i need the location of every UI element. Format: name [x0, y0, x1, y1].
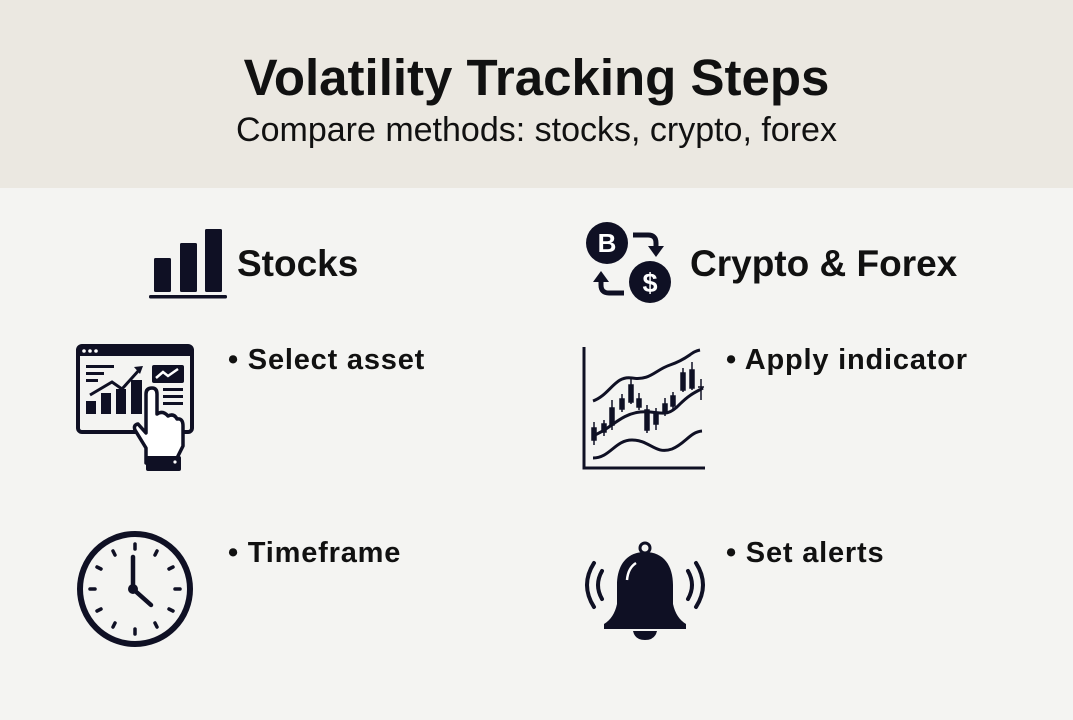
icon: stocks bar chart — [149, 229, 227, 298]
heading: Stocks: Stocks — [237, 243, 358, 284]
icon: crypto forex exchange — [586, 222, 671, 303]
title: Volatility Tracking Steps — [244, 49, 829, 106]
text: B — [598, 228, 616, 258]
text: $ — [642, 268, 658, 298]
text: Set alerts: • Set alerts — [726, 537, 884, 569]
text: Apply indicator: • Apply indicator — [726, 344, 968, 376]
text: Timeframe: • Timeframe — [228, 537, 401, 569]
icon: clock — [77, 531, 193, 647]
icon: select asset dashboard — [76, 344, 194, 471]
icon: bell — [585, 542, 705, 640]
header band — [0, 0, 1073, 188]
subtitle: Compare methods: stocks, crypto, forex — [236, 111, 837, 149]
heading: Crypto & Forex: Crypto & Forex — [690, 243, 957, 284]
icon: indicator chart — [582, 347, 705, 470]
text: Select asset: • Select asset — [228, 344, 425, 376]
